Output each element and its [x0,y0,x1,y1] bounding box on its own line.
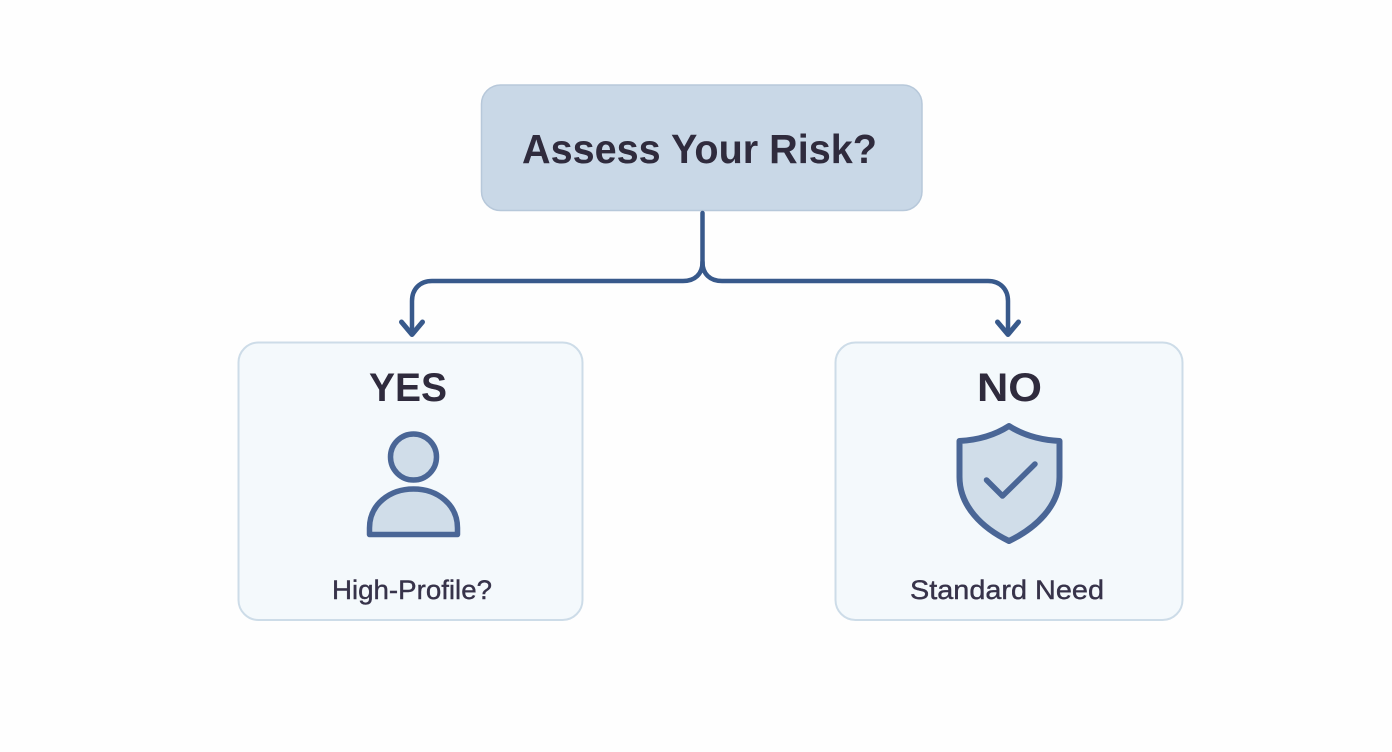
icon: person [370,434,458,534]
heading: NO: NO [977,366,1042,410]
icon: shield with check [960,426,1060,541]
heading: Assess Your Risk?: Assess Your Risk? [522,126,877,172]
arrow: branching connector to YES and NO [402,213,1018,334]
label: Standard Need: Standard Need [910,575,1104,605]
label: High-Profile?: High-Profile? [332,575,492,605]
panel: question box [482,85,922,210]
panel: NO [836,342,1182,620]
heading: YES: YES [369,366,447,410]
panel: YES [238,342,582,620]
